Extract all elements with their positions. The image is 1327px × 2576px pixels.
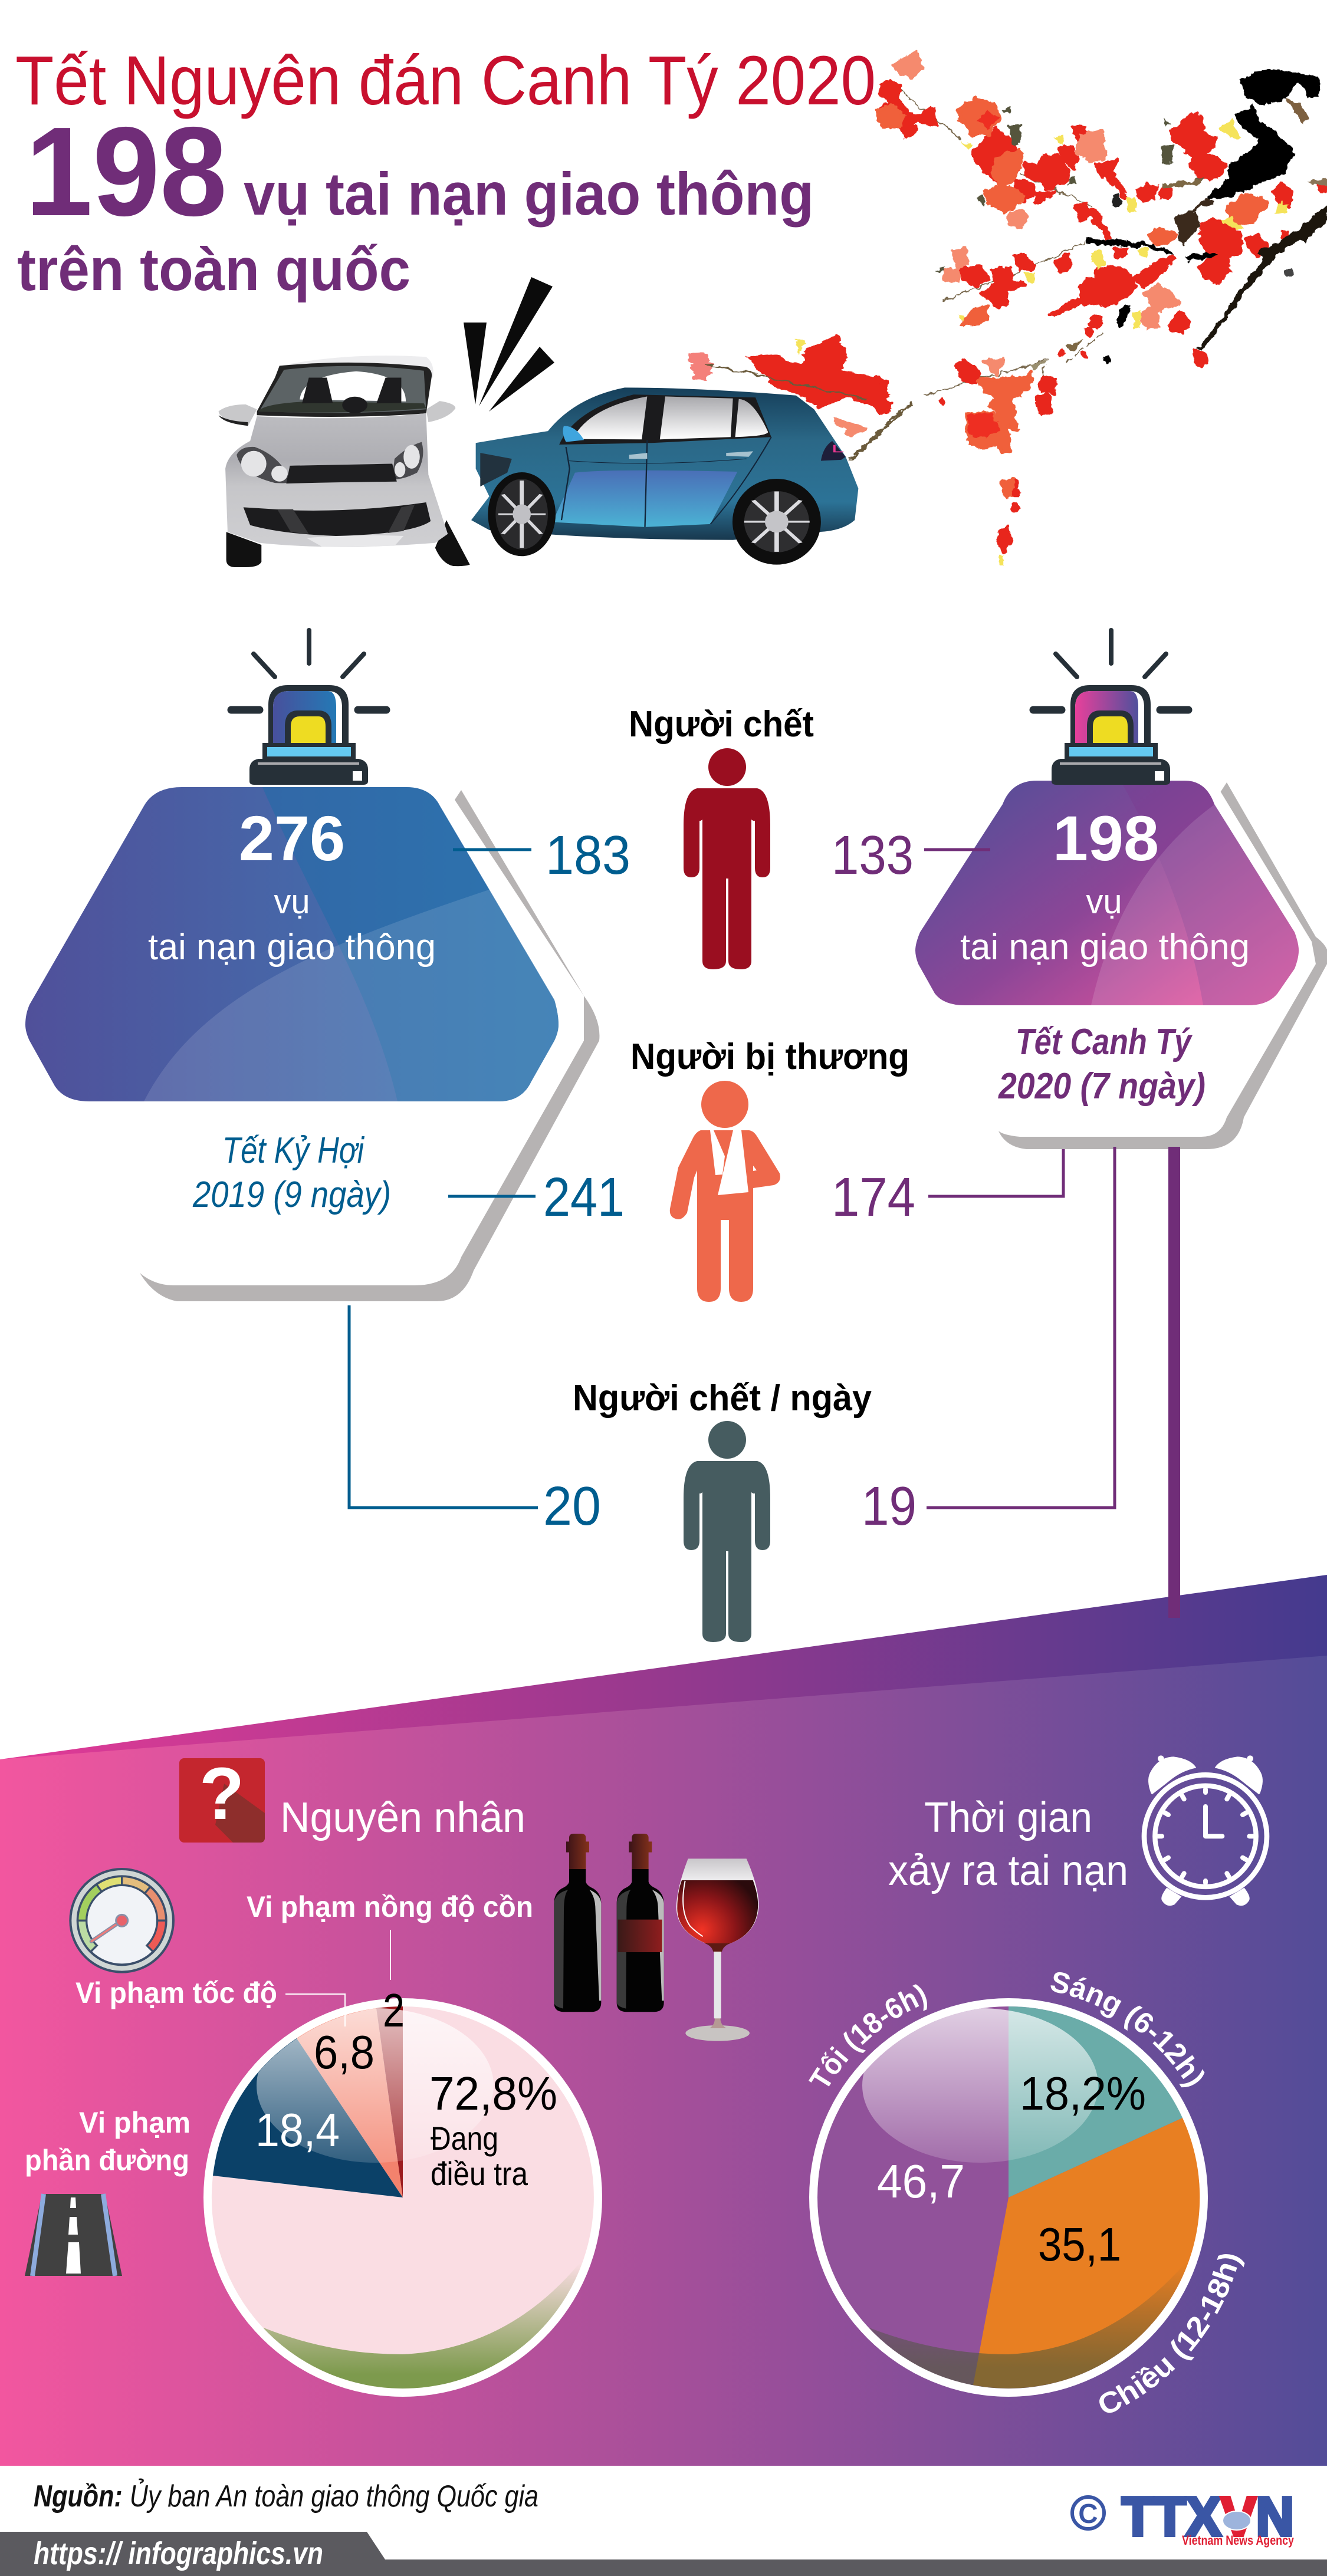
headline: tren toan quoc: trên toàn quốc <box>17 236 410 303</box>
2019 label: vu: vụ <box>274 883 310 921</box>
illustration: impact spikes <box>464 277 554 412</box>
pie chart: time of day <box>809 1998 1208 2397</box>
cause label: speeding: Vi phạm tốc độ <box>75 1976 277 2009</box>
pie value: 35,1: 35,1 <box>1038 2218 1121 2271</box>
heading: thoi gian: Thời gian <box>924 1794 1092 1841</box>
label: nguoi chet / ngay: Người chết / ngày <box>573 1378 872 1419</box>
illustration: blue car <box>471 387 858 565</box>
figure: injured 2020: 174 <box>832 1166 915 1228</box>
panel: Tet Canh Ty 2020 backing <box>955 782 1327 1149</box>
connector lines <box>349 850 1115 1508</box>
pie value: 6,8: 6,8 <box>314 2026 375 2078</box>
copyright logo: C <box>1078 2498 1098 2529</box>
heading: nguyen nhan: Nguyên nhân <box>280 1794 525 1841</box>
2019 label: tai nan giao thong: tai nạn giao thông <box>148 927 436 968</box>
figure: deaths per day 2020: 19 <box>862 1475 917 1537</box>
footer band <box>0 2532 1327 2576</box>
2020 label: tai nan giao thong: tai nạn giao thông <box>960 927 1250 968</box>
icon: speedometer <box>70 1869 173 1972</box>
curved label: night: Tối (18-6h) <box>809 1984 927 2087</box>
slice: road violation <box>213 2038 403 2197</box>
pie value: 18,4: 18,4 <box>255 2104 340 2156</box>
agency logo: TTXVN: TTXVN <box>1122 2486 1294 2547</box>
icon: wine glass <box>676 1858 759 2041</box>
title: Tet Nguyen dan Canh Ty 2020: Tết Nguyên đán Canh Tý 2020 <box>15 42 876 120</box>
figure: deaths per day 2019: 20 <box>543 1475 601 1537</box>
caption: Tet Canh Ty: Tết Canh Tý <box>1016 1022 1193 1062</box>
headline number 198: 198 <box>25 100 227 242</box>
slice: speeding <box>297 2008 403 2197</box>
panel: bottom gradient section <box>0 1575 1327 2466</box>
pie value: 46,7: 46,7 <box>877 2155 965 2207</box>
slice: under investigation <box>212 2006 594 2389</box>
cause label: road violation line 1: Vi phạm <box>79 2106 190 2139</box>
pie value: 72,8%: 72,8% <box>429 2067 557 2120</box>
pie value: 18,2%: 18,2% <box>1020 2067 1146 2120</box>
headline: vu tai nan giao thong: vụ tai nạn giao thông <box>244 160 814 228</box>
figure: deaths 2020: 133 <box>832 824 914 886</box>
icon: question mark <box>179 1753 265 1843</box>
glossy highlight <box>257 2008 494 2163</box>
illustration: silver car <box>219 356 470 567</box>
label: nguoi bi thuong: Người bị thương <box>630 1037 909 1077</box>
illustration: blossom behind blue car <box>688 335 908 460</box>
2019 accident count: 276 <box>239 802 345 874</box>
pie value: 2: 2 <box>383 1984 405 2037</box>
pie label: dieu tra: điều tra <box>431 2155 528 2192</box>
source line: Nguồn: Ủy ban An toàn giao thông Quốc gia <box>34 2478 538 2514</box>
2020 accident count: 198 <box>1053 802 1159 874</box>
icon: orange injured person <box>670 1081 780 1302</box>
icon: road <box>25 2194 122 2276</box>
green bottom shade <box>264 2269 580 2389</box>
connector: thick purple bar <box>1168 1147 1180 1618</box>
cause label: road violation line 2: phần đường <box>25 2144 189 2177</box>
icon: siren right <box>1033 630 1188 785</box>
icon: grey person <box>684 1421 770 1642</box>
agency logo: TTXVN: Vietnam News Agency <box>1182 2533 1295 2548</box>
cause label: alcohol: Vi phạm nồng độ cồn <box>247 1890 533 1923</box>
panel: blue hexagon 2019 <box>25 787 559 1101</box>
figure: deaths 2019: 183 <box>546 824 630 886</box>
glossy highlight <box>862 2008 1098 2163</box>
icon: dark red person <box>684 748 770 969</box>
icon: question mark: ? <box>199 1753 244 1835</box>
curved label: morning: Sáng (6-12h) <box>1051 1972 1204 2087</box>
pie label: dang: Đang <box>431 2120 498 2157</box>
caption: Tet Ky Hoi: Tết Kỷ Hợi <box>222 1130 365 1171</box>
copyright logo <box>1072 2497 1104 2529</box>
label: nguoi chet: Người chết <box>629 704 814 745</box>
pie chart: causes <box>203 1998 602 2397</box>
slice: afternoon <box>973 2118 1200 2389</box>
icon: alarm clock <box>1144 1755 1267 1906</box>
curved label: afternoon: Chiều (12-18h) <box>1099 2254 1244 2413</box>
bottom shade <box>869 2271 1184 2389</box>
caption: 2019 9 days: 2019 (9 ngày) <box>192 1175 391 1215</box>
2020 label: vu: vụ <box>1086 883 1122 921</box>
panel: magenta hexagon 2020 <box>915 781 1327 1005</box>
panel: Tet Ky Hoi 2019 backing <box>88 790 599 1301</box>
caption: 2020 7 days: 2020 (7 ngày) <box>998 1066 1206 1107</box>
slice: alcohol <box>376 2006 403 2197</box>
figure: injured 2019: 241 <box>543 1166 625 1228</box>
icon: siren left <box>231 630 386 785</box>
illustration: apricot blossom branch <box>855 53 1327 568</box>
icon: wine bottles <box>554 1834 664 2012</box>
slice: morning <box>1009 2006 1183 2197</box>
heading: xay ra tai nan: xảy ra tai nạn <box>888 1847 1128 1894</box>
footer url: https:// infographics.vn <box>34 2536 323 2571</box>
